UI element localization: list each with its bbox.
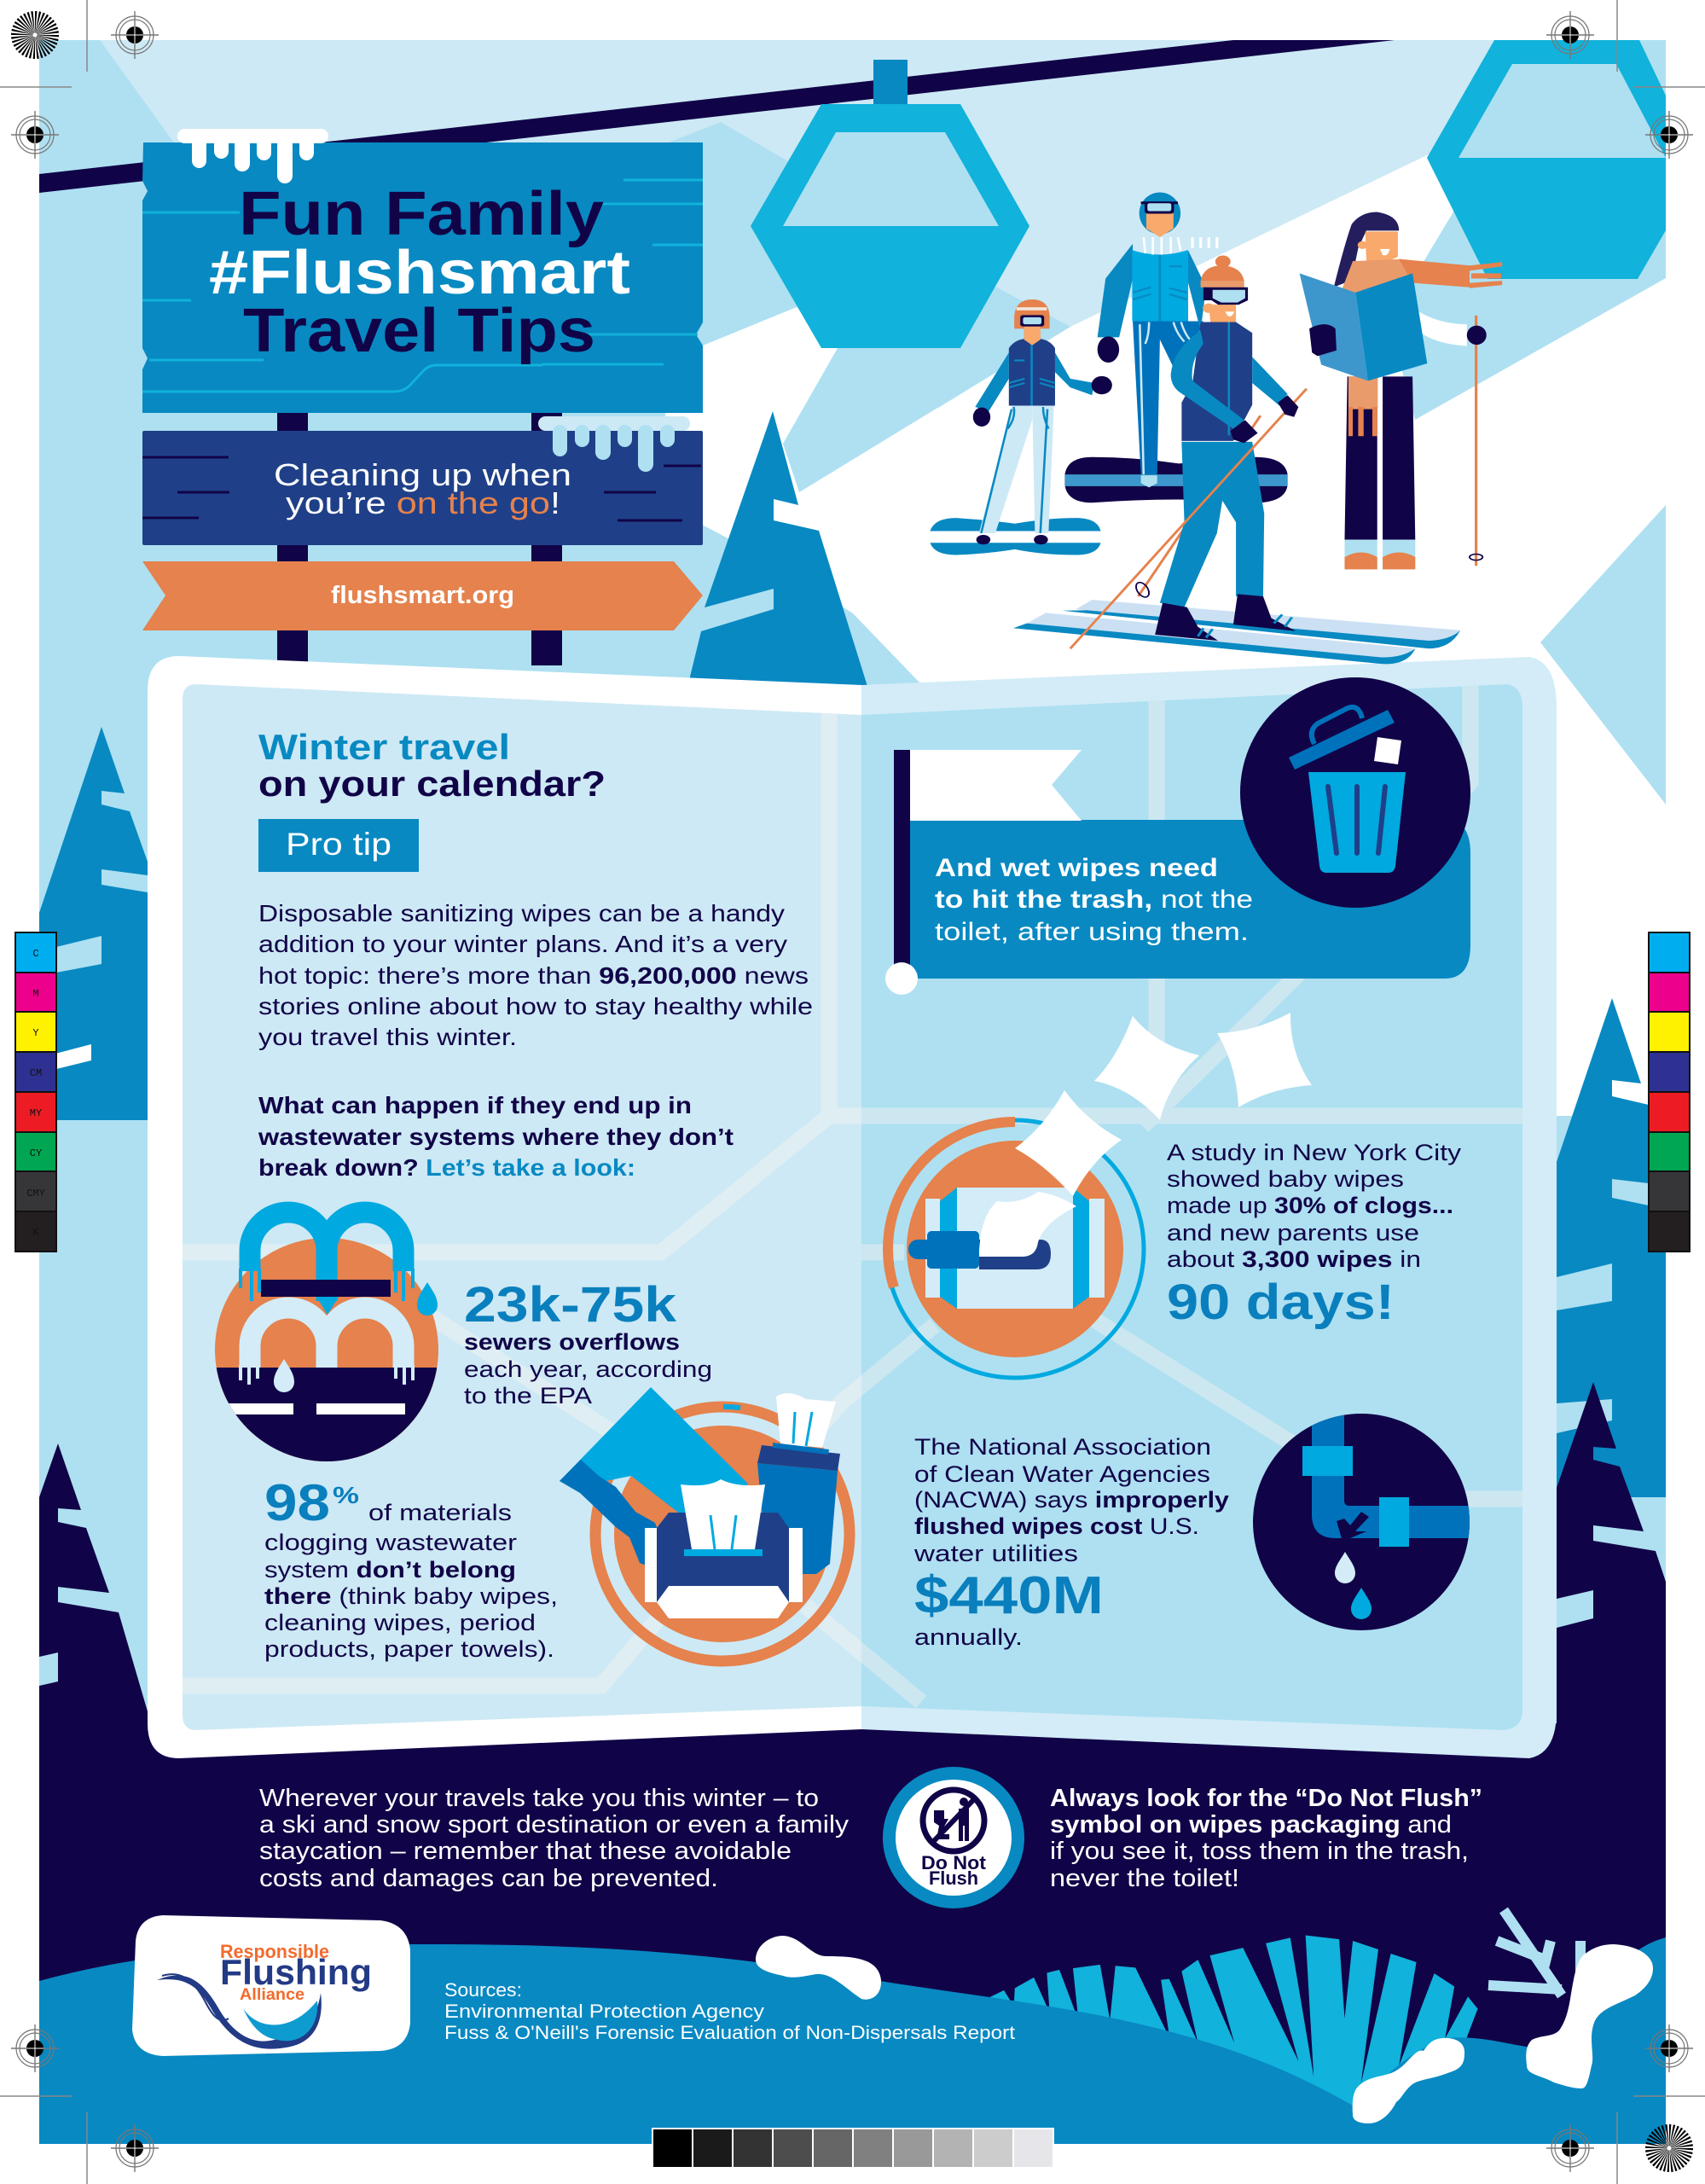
stat: 98 percent: 98: [264, 1474, 330, 1531]
icon: leaking pipe: [1253, 1408, 1476, 1630]
stat: 90 days: A study in New York City: [1167, 1140, 1462, 1165]
colour bar left: MY: [30, 1107, 42, 1119]
footer text right: [1050, 1785, 1482, 1892]
website arrow banner: flushsmart.org: [331, 582, 514, 609]
stat: $440M: water utilities: [913, 1541, 1078, 1566]
left dark pine tree: [39, 1443, 154, 1732]
callout flag: wet wipes: to hit the trash, not the: [935, 886, 1253, 914]
sign posts: [277, 410, 562, 665]
stat: 98 percent: [264, 1474, 558, 1662]
stat: 98 percent: products, paper towels).: [264, 1636, 554, 1662]
child snowboarder: [930, 299, 1112, 555]
stat: 90 days: made up 30% of clogs...: [1167, 1193, 1453, 1218]
question paragraph: What can happen if they end up in: [258, 1092, 692, 1118]
colour bar left: CMY: [26, 1188, 45, 1199]
pro tip label: [258, 819, 419, 872]
poles behind: [1138, 415, 1261, 596]
stat: $440M: flushed wipes cost U.S.: [914, 1513, 1199, 1539]
do not flush badge: Flush: [929, 1867, 978, 1889]
footer text left: staycation – remember that these avoidable: [259, 1838, 792, 1865]
footer text left: costs and damages can be prevented.: [259, 1865, 718, 1892]
stat: $440M: annually.: [914, 1624, 1023, 1650]
subtitle text: [274, 457, 571, 520]
intro paragraph: addition to your winter plans. And it’s a very: [258, 931, 787, 957]
sources: Fuss & O'Neill's Forensic Evaluation of Non-Dispersals Report: [444, 2022, 1015, 2043]
snow fan tree: [989, 1936, 1478, 2108]
question paragraph: [258, 1092, 734, 1181]
stat: 90 days: about 3,300 wipes in: [1167, 1246, 1421, 1272]
right blue pine tree: [1557, 998, 1666, 1497]
title text: Travel Tips: [243, 297, 595, 365]
left blue pine tree: [39, 727, 148, 1120]
skiers illustration: [930, 193, 1502, 664]
title text: [209, 180, 630, 365]
footer text right: Always look for the “Do Not Flush”: [1050, 1785, 1482, 1812]
subtitle text: Cleaning up when: [274, 457, 571, 492]
stat: 98 percent: %: [333, 1482, 359, 1508]
footer text right: if you see it, toss them in the trash,: [1050, 1838, 1469, 1865]
do not flush badge: Do Not: [921, 1852, 987, 1873]
intro paragraph: Disposable sanitizing wipes can be a handy: [258, 900, 785, 926]
colour bar right: [1649, 932, 1690, 1252]
logo badge: [132, 1915, 410, 2056]
centre pine tree: [682, 411, 874, 708]
icicles white: [177, 129, 328, 183]
stat: $440M: [913, 1434, 1229, 1650]
woman with map: [1300, 212, 1502, 569]
subtitle text: you’re on the go !: [286, 485, 560, 520]
logo badge: Alliance: [240, 1986, 304, 2004]
gondola left: [751, 60, 1029, 348]
subtitle sign: [142, 416, 703, 545]
stat: sewer overflows: each year, according: [464, 1356, 712, 1382]
question paragraph: wastewater systems where they don’t: [258, 1124, 734, 1150]
icicles light: [538, 416, 690, 472]
stat: $440M: $440M: [914, 1566, 1104, 1625]
gondola right: [1427, 40, 1666, 279]
intro paragraph: hot topic: there’s more than 96,200,000 news: [258, 962, 809, 989]
man with snowboard: [1064, 193, 1288, 502]
stat: sewer overflows: 23k-75k: [464, 1277, 677, 1333]
panel heading: [258, 727, 606, 804]
stat: $440M: (NACWA) says improperly: [914, 1487, 1229, 1513]
icon: floating wipes: [1015, 1013, 1312, 1196]
colour bar left: CY: [30, 1147, 42, 1159]
stat: 90 days: 90 days!: [1167, 1275, 1395, 1330]
right dark pine tree: [1557, 1382, 1666, 1732]
colour bar left: C: [32, 948, 39, 960]
blue snow hill: [39, 1937, 1666, 2144]
map roads right page: [805, 674, 1522, 1702]
stat: $440M: The National Association: [914, 1434, 1211, 1460]
stat: 90 days: and new parents use: [1167, 1220, 1419, 1246]
website arrow banner: [142, 561, 703, 630]
intro paragraph: stories online about how to stay healthy while: [258, 993, 813, 1019]
sources: Sources:: [444, 1979, 522, 2001]
callout flag: wet wipes: toilet, after using them.: [935, 918, 1249, 946]
footer text left: a ski and snow sport destination or even a family: [259, 1811, 850, 1838]
stat: 98 percent: there (think baby wipes,: [264, 1583, 558, 1609]
map panel frame: [148, 656, 1557, 1758]
footer dark band: [39, 1723, 1666, 2144]
logo badge: Responsible: [220, 1941, 329, 1962]
title text: #Flushsmart: [209, 239, 630, 307]
colour bar left: M: [32, 988, 39, 1000]
stat: 90 days: showed baby wipes: [1167, 1166, 1404, 1192]
background: winter scene: [39, 40, 1666, 1723]
title sign: [142, 129, 703, 413]
icon: sewer overflow: [205, 1212, 452, 1470]
pro tip label: Pro tip: [286, 827, 391, 862]
front skier: [1070, 255, 1307, 648]
footer text right: never the toilet!: [1050, 1865, 1239, 1892]
stat: $440M: of Clean Water Agencies: [914, 1461, 1210, 1487]
panel heading: on your calendar?: [258, 764, 606, 804]
question paragraph: break down? Let’s take a look:: [258, 1154, 635, 1181]
cable wire: [39, 40, 1395, 193]
colour bar left: K: [32, 1227, 39, 1239]
icon: wipes packages: [560, 1387, 850, 1661]
stat: sewer overflows: to the EPA: [464, 1383, 592, 1409]
stat: 98 percent: of materials: [368, 1500, 512, 1525]
stat: 98 percent: cleaning wipes, period: [264, 1610, 536, 1635]
stat: sewer overflows: sewers overflows: [464, 1329, 680, 1355]
stat: 98 percent: clogging wastewater: [264, 1530, 517, 1555]
icon: trash can: [1240, 677, 1470, 908]
sources: [444, 1979, 1015, 2043]
stat: sewer overflows: [464, 1277, 712, 1409]
callout flag: wet wipes: [885, 750, 1470, 995]
grayscale strip: [652, 2129, 1053, 2168]
colour bar left: Y: [32, 1027, 39, 1039]
panel heading: Winter travel: [258, 727, 510, 767]
colour bar left: [15, 932, 56, 1252]
do not flush badge: [883, 1767, 1024, 1908]
title text: Fun Family: [239, 180, 604, 248]
icon: clogged pipe with wipes: [886, 1120, 1144, 1378]
stat: 98 percent: system don’t belong: [264, 1557, 516, 1583]
stat: 90 days: [1167, 1140, 1462, 1330]
logo badge: Flushing: [220, 1952, 372, 1992]
intro paragraph: you travel this winter.: [258, 1024, 517, 1050]
map roads left page: [183, 713, 861, 1694]
sources: Environmental Protection Agency: [444, 2001, 764, 2022]
skis: [1013, 600, 1460, 664]
footer text left: Wherever your travels take you this winter – to: [259, 1785, 819, 1812]
snow branch: [1488, 1910, 1580, 1996]
colour bar left: CM: [30, 1067, 42, 1079]
intro paragraph: [258, 900, 813, 1050]
footer text right: symbol on wipes packaging and: [1050, 1811, 1452, 1838]
snow blobs: [756, 1936, 1653, 2123]
callout flag: wet wipes: And wet wipes need: [935, 854, 1218, 882]
footer text left: [259, 1785, 850, 1892]
